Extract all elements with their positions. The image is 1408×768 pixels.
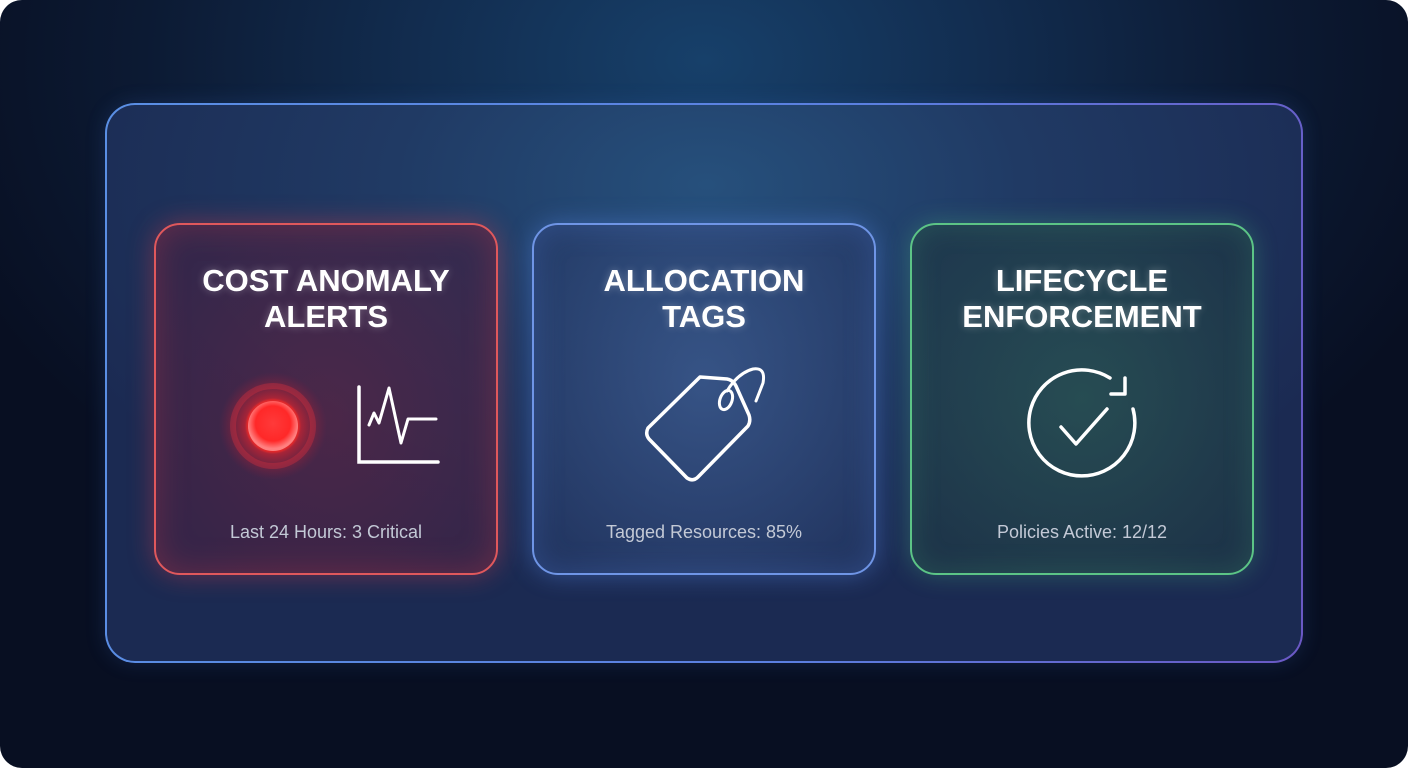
title: allocation tags: ALLOCATION [604, 263, 804, 298]
icon: circular check [1027, 368, 1137, 478]
title: lifecycle enforcement: LIFECYCLE [996, 263, 1168, 298]
title: cost anomaly alerts: ALERTS [264, 299, 388, 334]
card: allocation tags [532, 223, 876, 575]
main panel [105, 103, 1303, 663]
title: cost anomaly alerts: COST ANOMALY [202, 263, 450, 298]
title: lifecycle enforcement [960, 263, 1202, 334]
title: lifecycle enforcement: ENFORCEMENT [962, 299, 1202, 334]
title: cost anomaly alerts [200, 263, 450, 334]
caption: tagged resources: Tagged Resources: 85% [606, 522, 802, 542]
icon: alert dot and chart [222, 376, 440, 476]
caption: critical count: Last 24 Hours: 3 Critical [230, 522, 422, 542]
caption: policies active: Policies Active: 12/12 [997, 522, 1167, 542]
title: allocation tags [602, 263, 806, 334]
icon: tag [644, 367, 766, 482]
card: lifecycle enforcement [910, 223, 1254, 575]
title: allocation tags: TAGS [662, 299, 746, 334]
card: cost anomaly alerts [154, 223, 498, 575]
